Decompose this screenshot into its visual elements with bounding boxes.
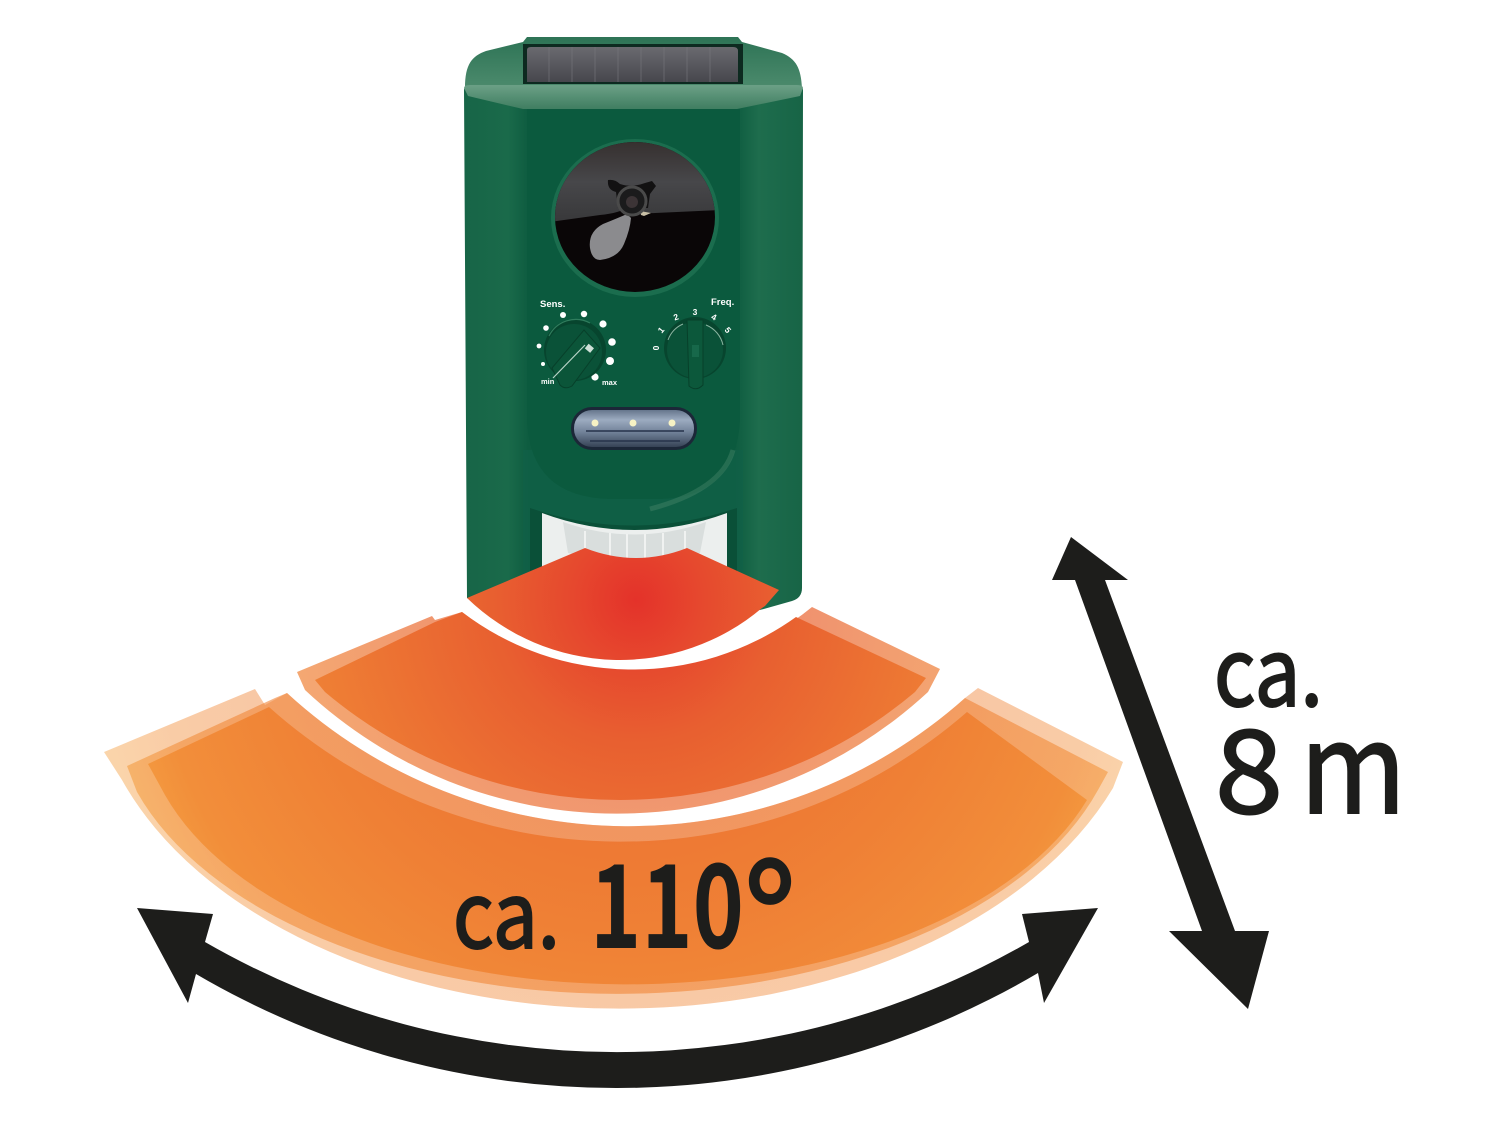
white gap behind sectors: [440, 598, 810, 695]
device body: [464, 86, 803, 610]
detection zone: inner red sector: [467, 548, 779, 660]
label: ca. 110 degrees: [453, 801, 797, 1018]
detection zone: middle sector: [297, 607, 940, 814]
frequency dial: Freq.: [711, 297, 734, 308]
detection zone: outer sector: [104, 688, 1123, 1009]
transducer cross: [608, 180, 656, 208]
straight arrow: 8 m distance: [1052, 537, 1269, 1009]
label: ca. 8 m: 8: [1215, 681, 1283, 847]
label: ca. 110 degrees: ca.: [453, 842, 560, 975]
sensitivity dial: max: [602, 378, 618, 387]
frequency dial: 5: [723, 325, 734, 335]
frequency dial: 1: [656, 325, 667, 335]
LED light bar: [571, 407, 697, 450]
frequency dial: 4: [710, 311, 718, 323]
sensitivity dial: [537, 299, 618, 388]
product: green solar device: [464, 37, 803, 610]
label: ca. 8 m: ca.: [1214, 598, 1323, 734]
frequency dial: [651, 297, 734, 389]
control recess: [527, 109, 740, 499]
frequency dial: 2: [672, 311, 680, 323]
label: ca. 8 m: [1214, 598, 1406, 849]
curved arrow: 110 degree span: [137, 908, 1098, 1088]
label: ca. 110 degrees: 110: [590, 814, 744, 982]
frequency dial: 3: [693, 307, 698, 317]
lens: [550, 139, 720, 297]
solar panel: [523, 44, 743, 84]
sensitivity dial: min: [541, 377, 555, 386]
body top bevel: [464, 85, 803, 109]
label: ca. 110 degrees: °: [743, 801, 797, 1018]
solar cap: [465, 37, 802, 88]
label: ca. 8 m: m: [1300, 668, 1406, 849]
frequency dial: 0: [651, 345, 661, 350]
sensitivity dial: Sens.: [540, 299, 565, 310]
lens reflection: [590, 214, 631, 260]
motion sensor: [530, 508, 737, 582]
lower body around sensor: [523, 450, 743, 600]
